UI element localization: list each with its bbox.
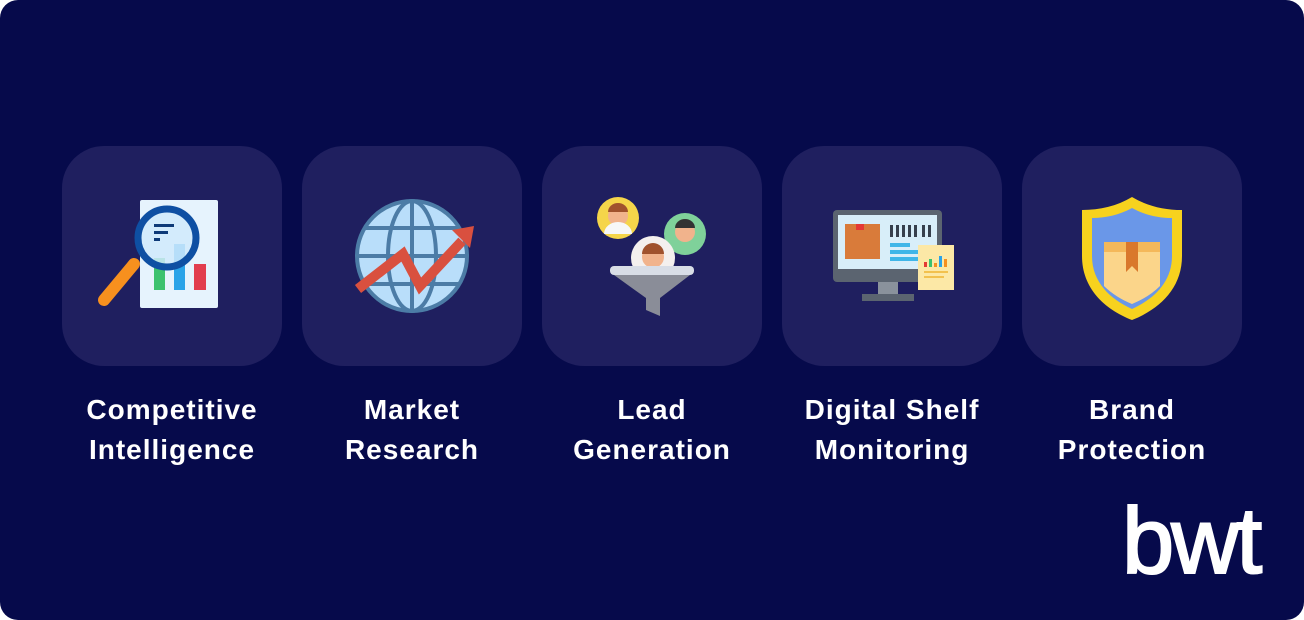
card: competitive intelligence: [62, 146, 282, 366]
label: digital shelf monitoring: [805, 394, 979, 465]
label: brand protection: Protection: [1058, 434, 1206, 465]
label: brand protection: Brand: [1089, 394, 1175, 425]
icon: globe with rising arrow: [355, 199, 474, 313]
label: lead generation: [573, 394, 731, 465]
label: lead generation: Lead: [617, 394, 687, 425]
label: brand protection: [1058, 394, 1206, 465]
icon: funnel with people: [597, 197, 706, 316]
card: digital shelf monitoring: [782, 146, 1002, 366]
card: lead generation: [542, 146, 762, 366]
label: digital shelf monitoring: Monitoring: [815, 434, 969, 465]
logo: bwt: bwt: [1122, 488, 1259, 593]
label: competitive intelligence: Competitive: [86, 394, 258, 425]
card: market research: [302, 146, 522, 366]
label: market research: [345, 394, 479, 465]
card: brand protection: [1022, 146, 1242, 366]
label: market research: Market: [364, 394, 460, 425]
label: lead generation: Generation: [573, 434, 731, 465]
icon: monitor with product: [833, 210, 954, 301]
label: market research: Research: [345, 434, 479, 465]
label: competitive intelligence: [86, 394, 258, 465]
icon: magnifier over report: [98, 200, 218, 308]
icon: shield with box: [1082, 197, 1182, 320]
label: competitive intelligence: Intelligence: [89, 434, 255, 465]
label: digital shelf monitoring: Digital Shelf: [805, 394, 979, 425]
